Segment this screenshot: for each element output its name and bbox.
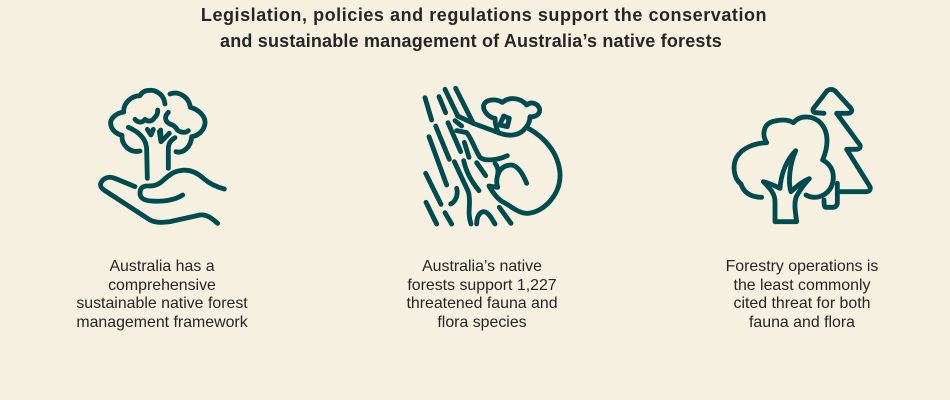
title: and sustainable management of Australia’s native forests [220, 31, 722, 51]
caption: forestry operations: the least commonly [734, 277, 870, 294]
icon: koala on a tree [422, 86, 562, 226]
caption: threatened species [406, 258, 558, 331]
caption: threatened species: Australia’s native [422, 258, 542, 275]
caption: forestry operations: fauna and flora [749, 314, 855, 331]
caption: framework: Australia has a [109, 258, 215, 275]
caption: framework [76, 258, 248, 331]
caption: forestry operations: Forestry operations is [726, 258, 878, 275]
title [201, 5, 767, 51]
caption: threatened species: threatened fauna and [406, 295, 558, 312]
caption: threatened species: flora species [437, 314, 527, 331]
caption: threatened species: forests support 1,227 [407, 277, 557, 294]
title: Legislation, policies and regulations support the conservation [201, 5, 767, 25]
caption: framework: management framework [76, 314, 248, 331]
icon: hand holding tree [98, 88, 227, 226]
icon: broadleaf and pine trees [732, 87, 873, 224]
caption: forestry operations [726, 258, 878, 331]
caption: forestry operations: cited threat for both [734, 295, 870, 312]
caption: framework: comprehensive [108, 277, 216, 294]
caption: framework: sustainable native forest [76, 295, 248, 312]
